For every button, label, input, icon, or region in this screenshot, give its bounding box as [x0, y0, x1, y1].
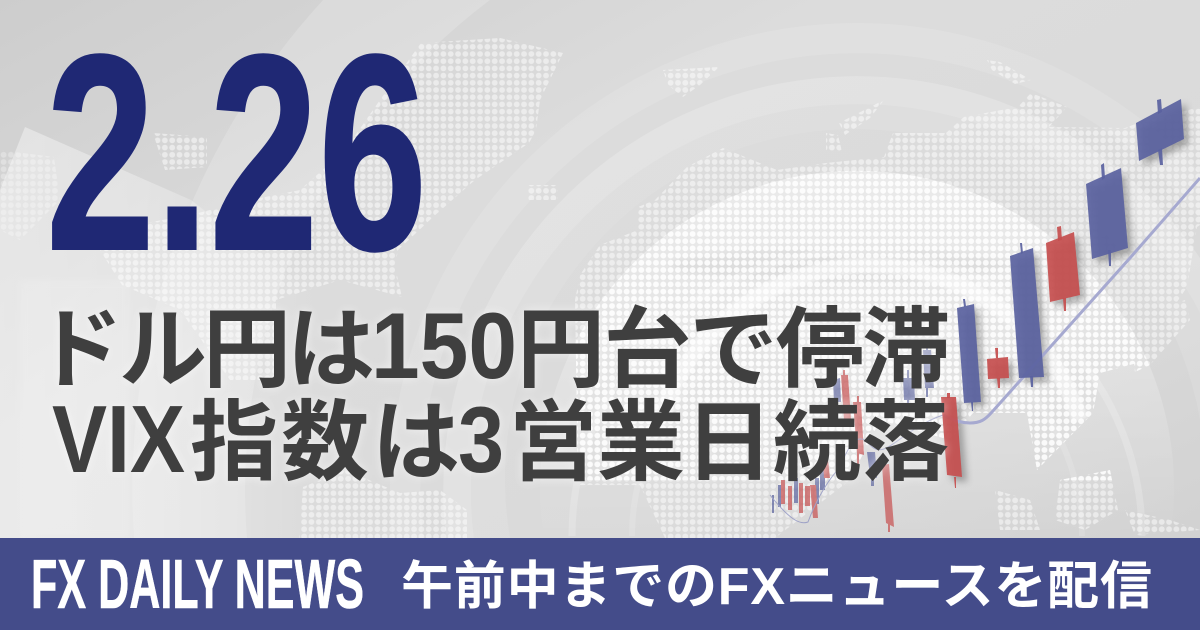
headline line 2: 指数は: [190, 393, 460, 492]
small background candlestick chart: [770, 345, 943, 532]
headline line 2: [52, 386, 949, 493]
date: 2.26: [46, 0, 427, 309]
main candlestick chart: [941, 99, 1200, 488]
headline line 2: 営業日続落: [509, 393, 949, 492]
headline line 2: 3: [458, 387, 504, 492]
headline line 1: 150: [371, 293, 517, 398]
footer banner: [0, 538, 1200, 630]
headline: [35, 293, 950, 493]
headline line 1: 円台で停滞: [517, 300, 950, 399]
headline line 1: [35, 293, 950, 399]
red candles: [941, 226, 1080, 488]
blue candles: [957, 99, 1184, 411]
headline line 2: VIX: [52, 386, 185, 493]
trend line: [943, 178, 1200, 423]
headline line 1: ドル円は: [35, 300, 375, 399]
banner title: FX DAILY NEWS: [31, 545, 364, 623]
banner subtitle: 午前中までのFXニュースを配信: [401, 558, 1152, 616]
